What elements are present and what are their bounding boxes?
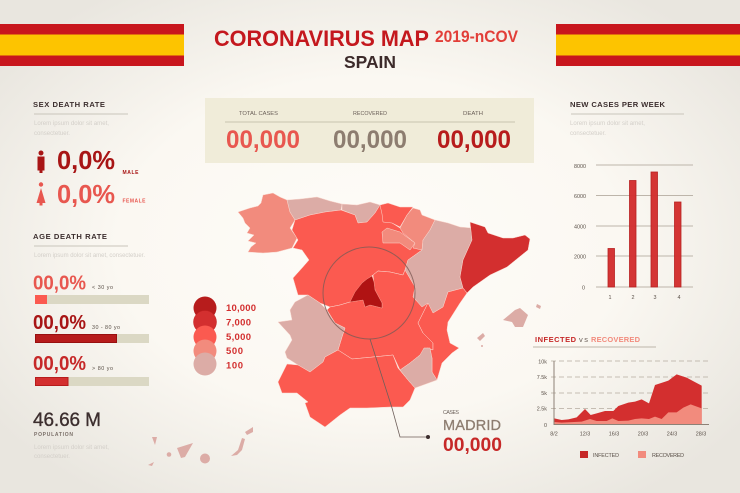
age group over 80: 00,0%: [33, 353, 86, 375]
age group 30 to 80: 30 - 80 yo: [92, 325, 120, 331]
death: DEATH: [463, 111, 483, 117]
panel: age death rate: [33, 232, 149, 386]
recovered: 00,000: [333, 126, 407, 154]
female rate: 0,0%: [57, 181, 115, 209]
description: Lorem ipsum dolor sit amet,: [34, 120, 109, 127]
legend: case scale: [194, 296, 256, 376]
title: CORONAVIRUS MAP: [214, 26, 429, 51]
region: Castilla y Leon: [292, 205, 423, 307]
chart legend: [580, 451, 684, 459]
bar chart: [574, 164, 693, 301]
callout line to Madrid label: [370, 339, 430, 439]
legend: case scale: 7,000: [226, 318, 251, 328]
region: Catalonia: [460, 222, 530, 293]
population: Lorem ipsum dolor sit amet,: [34, 444, 109, 451]
title: SPAIN: [344, 52, 396, 72]
heading: SEX DEATH RATE: [33, 100, 105, 109]
region: Madrid: [350, 276, 382, 308]
chart legend: RECOVERED: [652, 453, 684, 459]
description: [570, 120, 645, 137]
area chart: 12/3: [580, 432, 590, 438]
description: Lorem ipsum dolor sit amet, consectetuer.: [34, 252, 145, 259]
total cases: [226, 111, 300, 154]
total cases: TOTAL CASES: [239, 111, 279, 117]
icon: male: [38, 150, 44, 173]
area chart: 10k: [538, 360, 547, 366]
bar chart: 1: [608, 295, 612, 301]
male rate: [57, 147, 139, 176]
area chart: 28/3: [696, 432, 706, 438]
area chart: 0: [544, 423, 547, 429]
male rate: MALE: [122, 170, 139, 176]
description: [34, 120, 109, 137]
region: Canary Islands: [148, 427, 253, 466]
population: POPULATION: [34, 432, 73, 438]
population: 46.66 M: [33, 410, 101, 431]
Madrid highlight circle: [323, 247, 415, 339]
panel: sex death rate: [33, 100, 146, 209]
panel: summary totals: [205, 98, 534, 163]
age group over 80: > 80 yo: [92, 366, 113, 372]
area chart: 20/3: [638, 432, 648, 438]
panel: new cases per week: [570, 100, 693, 301]
bar chart: 4000: [574, 224, 586, 230]
callout: Madrid cases: MADRID: [443, 418, 501, 434]
legend: case scale: 500: [226, 346, 243, 357]
legend: case scale: 10,000: [226, 303, 256, 314]
region: Murcia: [400, 348, 437, 388]
area chart: [537, 360, 710, 438]
area chart: 8/2: [550, 432, 558, 438]
flag: right Spain: [556, 24, 740, 66]
male rate: 0,0%: [57, 147, 115, 175]
bar chart: 4: [678, 295, 680, 301]
description: Lorem ipsum dolor sit amet,: [570, 120, 645, 127]
region: Andalusia: [278, 350, 415, 427]
heading: [535, 335, 641, 344]
bar chart: 2000: [574, 254, 586, 260]
callout: Madrid cases: CASES: [443, 410, 460, 416]
heading: INFECTED: [535, 335, 577, 344]
total cases: 00,000: [226, 126, 300, 154]
recovered: RECOVERED: [353, 111, 387, 117]
callout: Madrid cases: 00,000: [443, 435, 502, 456]
area chart: 16/3: [609, 432, 619, 438]
callout: Madrid cases: [443, 410, 502, 456]
region: Castilla-La Mancha: [327, 270, 433, 370]
heading: vs: [579, 335, 588, 344]
region: Asturias: [287, 197, 342, 220]
region: Basque Country: [380, 203, 413, 227]
age group over 80: [33, 353, 149, 386]
female rate: [57, 181, 146, 209]
bar chart: 8000: [574, 164, 586, 170]
death: [437, 111, 511, 154]
bar chart: 2: [632, 295, 634, 301]
age group under 30: 00,0%: [33, 272, 86, 294]
title: 2019-nCOV: [435, 28, 518, 46]
description: consectetuer.: [34, 130, 70, 137]
bar chart: 3: [654, 295, 656, 301]
flag: left Spain: [0, 24, 184, 66]
age group 30 to 80: [33, 312, 149, 343]
area chart: 5k: [541, 391, 547, 397]
region: Valencia: [418, 288, 467, 380]
heading: AGE DEATH RATE: [33, 232, 107, 241]
map: Spain regions: [148, 193, 541, 466]
female rate: FEMALE: [122, 198, 146, 204]
population: [33, 410, 109, 460]
description: consectetuer.: [570, 130, 606, 137]
bar chart: 6000: [574, 194, 586, 200]
heading: RECOVERED: [591, 335, 641, 344]
icon: female: [36, 182, 46, 206]
age group 30 to 80: 00,0%: [33, 312, 86, 334]
region: Balearic Islands: [477, 304, 541, 347]
area chart: 7.5k: [537, 375, 547, 381]
age group under 30: < 30 yo: [92, 285, 113, 291]
region: La Rioja: [382, 228, 415, 250]
legend: case scale: 100: [226, 360, 243, 372]
region: Cantabria: [342, 202, 380, 223]
area chart: 2.5k: [537, 406, 547, 412]
age group under 30: [33, 272, 149, 304]
population: consectetuer.: [34, 453, 70, 460]
heading: NEW CASES PER WEEK: [570, 100, 666, 109]
death: 00,000: [437, 126, 511, 154]
region: Aragon: [405, 220, 472, 313]
panel: infected vs recovered: [533, 335, 710, 459]
region: Extremadura: [278, 295, 345, 372]
bar chart: 0: [582, 286, 585, 292]
chart legend: INFECTED: [593, 453, 619, 459]
region: Galicia: [238, 193, 297, 253]
legend: case scale: 5,000: [226, 332, 251, 343]
area chart: 24/3: [667, 432, 677, 438]
region: Navarra: [400, 208, 435, 250]
title: [214, 26, 518, 72]
recovered: [333, 111, 407, 154]
